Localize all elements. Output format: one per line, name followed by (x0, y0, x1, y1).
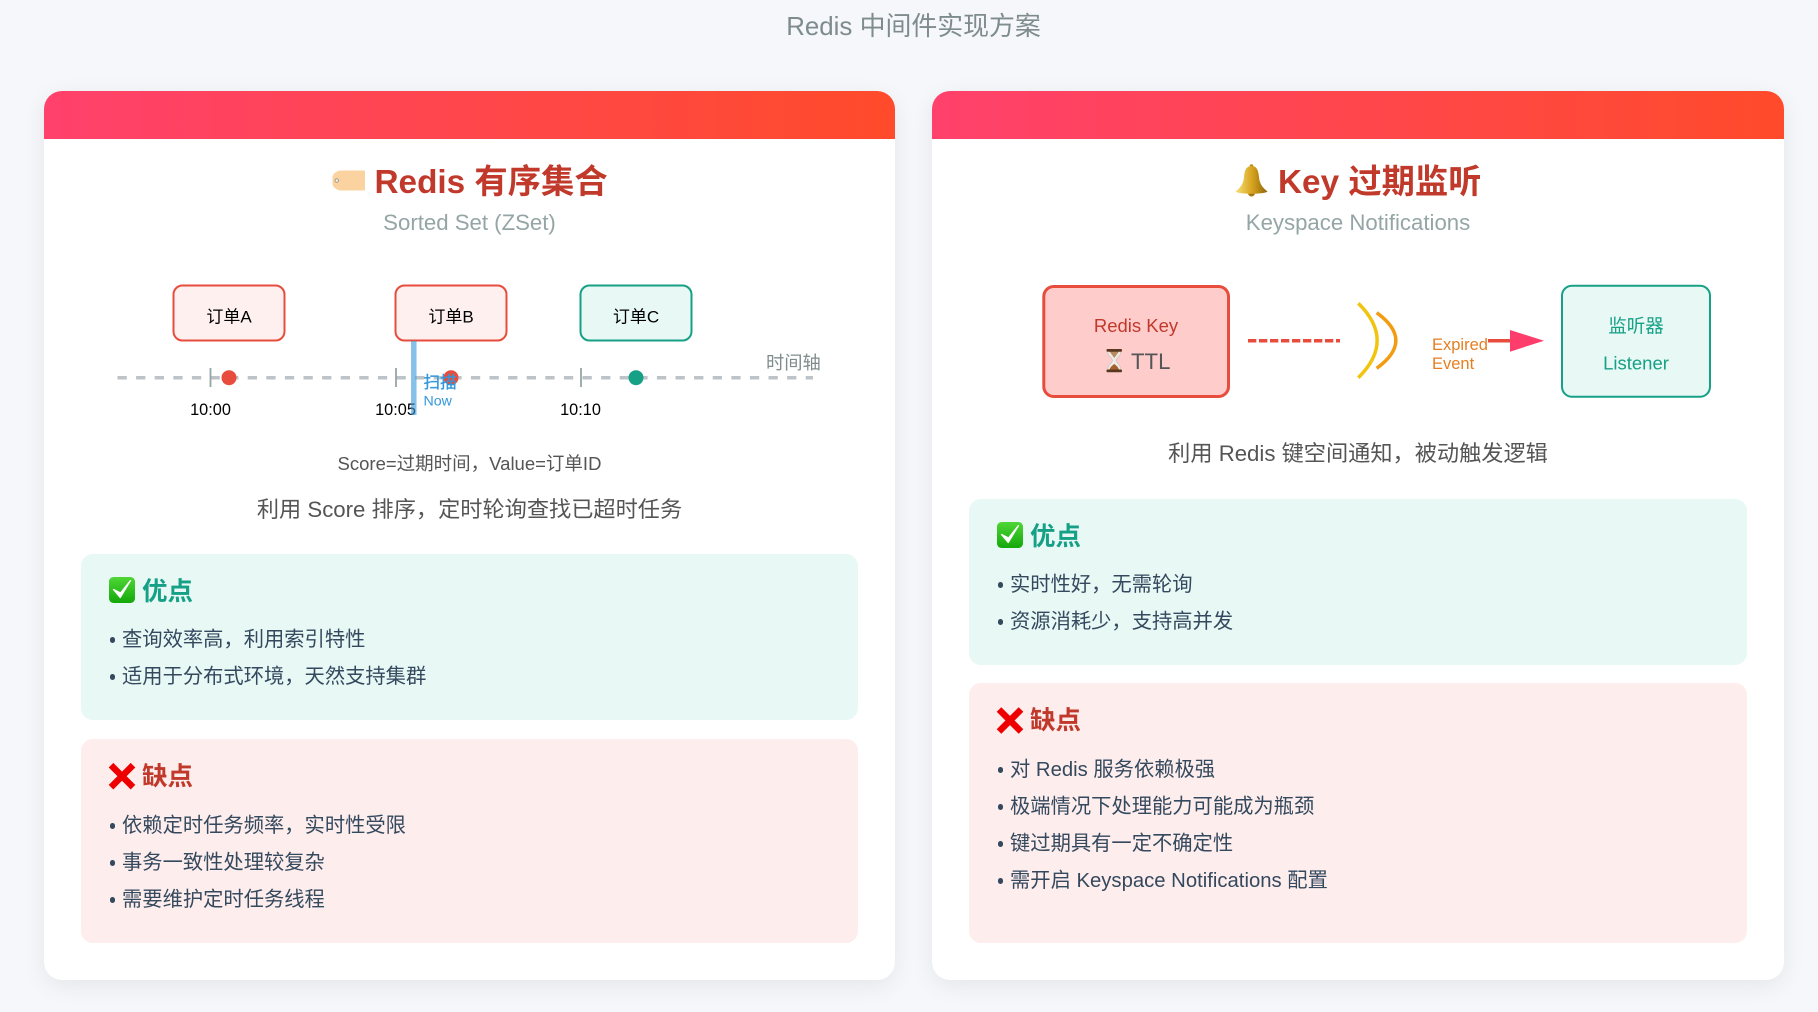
time labels: 10:00 (190, 401, 231, 419)
time labels: 10:10 (560, 401, 601, 419)
list: keyspace cons: 极端情况下处理能力可能成为瓶颈 (1010, 796, 1314, 818)
subtitle: keyspace notifications: Keyspace Notifications (1246, 210, 1470, 235)
Listener box: Listener (1603, 352, 1669, 374)
order B box: 订单B (428, 307, 474, 326)
panel: keyspace cons (969, 683, 1747, 943)
list: keyspace pros (998, 574, 1233, 633)
order A box: 订单A (206, 307, 252, 326)
list: sorted set cons: 依赖定时任务频率，实时性受限 (122, 815, 406, 837)
time labels: 10:05 (375, 401, 416, 419)
subtitle: Sorted Set: Sorted Set (ZSet) (383, 210, 556, 235)
signal arc: yellow (1358, 303, 1377, 378)
list: sorted set cons: 事务一致性处理较复杂 (122, 852, 325, 874)
expired event label: Event (1432, 355, 1475, 373)
order C box: 订单C (613, 307, 659, 326)
heading: cons: 缺点 (142, 763, 193, 791)
tick marks (210, 368, 581, 387)
Redis Key box: Redis Key (1094, 315, 1179, 336)
list: sorted set pros (110, 628, 426, 688)
Redis Key box: TTL (1131, 349, 1170, 374)
scan line (411, 341, 417, 415)
title: Redis 中间件实现方案 (786, 13, 1041, 41)
list: sorted set pros: 查询效率高，利用索引特性 (122, 629, 365, 651)
panel: Key expiry listener (932, 91, 1784, 980)
Listener box: 监听器 (1608, 316, 1664, 336)
dashed connection (1248, 339, 1340, 342)
time labels (190, 401, 601, 419)
list: keyspace pros: 资源消耗少，支持高并发 (1010, 611, 1233, 633)
Redis Key box (1044, 286, 1228, 396)
heading: Redis sorted set: Redis 有序集合 (374, 164, 608, 201)
caption: score and value: Score=过期时间，Value=订单ID (338, 453, 601, 474)
description: sorted set: 利用 Score 排序，定时轮询查找已超时任务 (257, 497, 682, 522)
heading: key expiry: Key 过期监听 (1278, 164, 1482, 201)
panel: sorted set pros (81, 554, 858, 720)
list: keyspace cons: 键过期具有一定不确定性 (1010, 833, 1233, 855)
order B box (396, 286, 506, 340)
panel: Redis sorted set (44, 91, 895, 980)
heading: pros: 优点 (142, 578, 193, 606)
scan label: 扫描 (424, 373, 457, 392)
description: keyspace: 利用 Redis 键空间通知，被动触发逻辑 (1168, 441, 1548, 466)
signal arc: orange (1377, 313, 1396, 368)
list: sorted set pros: 适用于分布式环境，天然支持集群 (122, 666, 426, 688)
heading: pros: 优点 (1030, 523, 1081, 551)
list: keyspace cons (998, 758, 1328, 892)
panel: sorted set cons (81, 739, 858, 943)
Listener box (1562, 286, 1710, 397)
panel: keyspace pros (969, 498, 1747, 664)
timeline axis (118, 376, 813, 379)
axis label: 时间轴 (766, 352, 821, 373)
icon: hourglass (1106, 349, 1122, 372)
list: sorted set cons (110, 814, 406, 911)
scan label: Now (424, 394, 453, 410)
list: keyspace cons: 对 Redis 服务依赖极强 (1010, 759, 1215, 781)
list: keyspace pros: 实时性好，无需轮询 (1010, 574, 1193, 596)
order C box (580, 286, 692, 340)
heading: cons: 缺点 (1030, 707, 1081, 735)
order A box (174, 286, 284, 340)
expired event label (1432, 336, 1488, 373)
list: keyspace cons: 需开启 Keyspace Notifications 配置 (1010, 870, 1328, 892)
arrow (1488, 330, 1544, 352)
list: sorted set cons: 需要维护定时任务线程 (122, 889, 325, 911)
expired event label: Expired (1432, 336, 1488, 354)
order dots (222, 370, 644, 385)
scan label (424, 373, 457, 410)
